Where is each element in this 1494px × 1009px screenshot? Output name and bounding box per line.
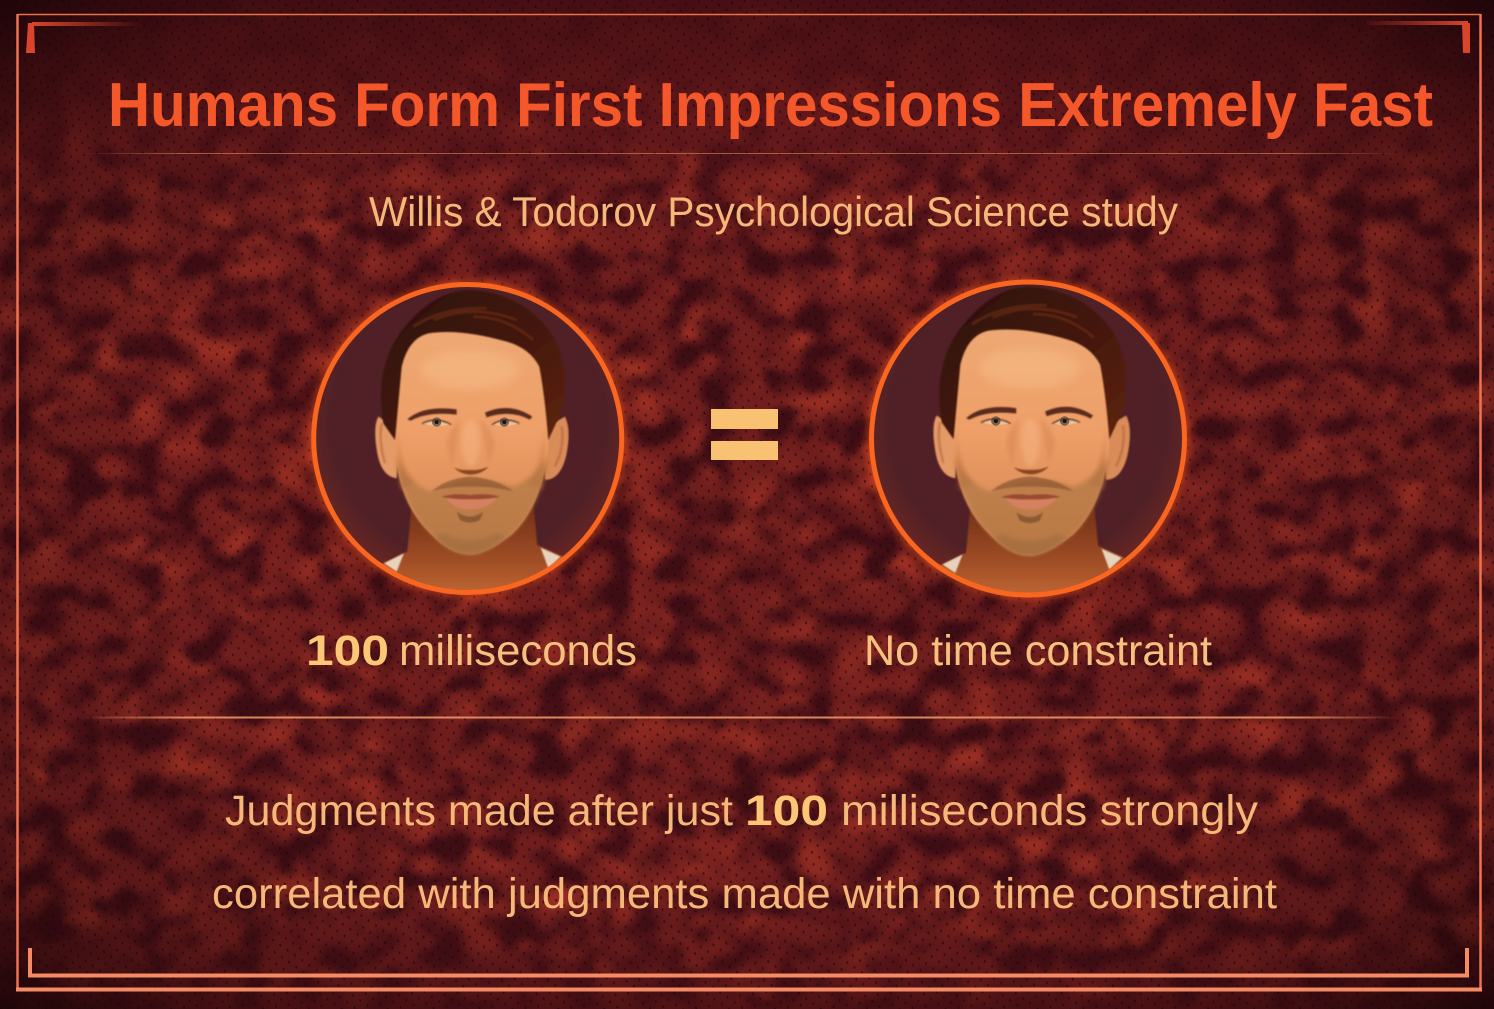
subtitle: Willis & Todorov Psychological Science study <box>369 188 1178 235</box>
top divider <box>80 153 1400 154</box>
lower divider <box>80 716 1400 718</box>
title: Humans Form First Impressions Extremely Fast <box>108 71 1433 140</box>
left caption: milliseconds <box>399 627 637 675</box>
left portrait: 100 milliseconds <box>310 280 627 603</box>
right caption: No time constraint <box>864 627 1212 675</box>
corner bracket: top left <box>26 22 142 53</box>
conclusion text <box>212 787 1277 918</box>
conclusion text: milliseconds strongly <box>841 787 1259 835</box>
inner bottom rule with bottom corner brackets <box>30 948 1467 976</box>
equals sign <box>711 409 778 460</box>
conclusion text: correlated with judgments made with no time constraint <box>212 870 1277 918</box>
left caption: 100 <box>306 627 389 675</box>
right portrait: no time constraint <box>867 277 1189 605</box>
face photo left <box>310 280 627 603</box>
face photo right <box>867 277 1189 605</box>
corner bracket: top right <box>1360 21 1470 53</box>
conclusion text: 100 <box>745 787 828 835</box>
conclusion text: Judgments made after just <box>225 787 733 835</box>
